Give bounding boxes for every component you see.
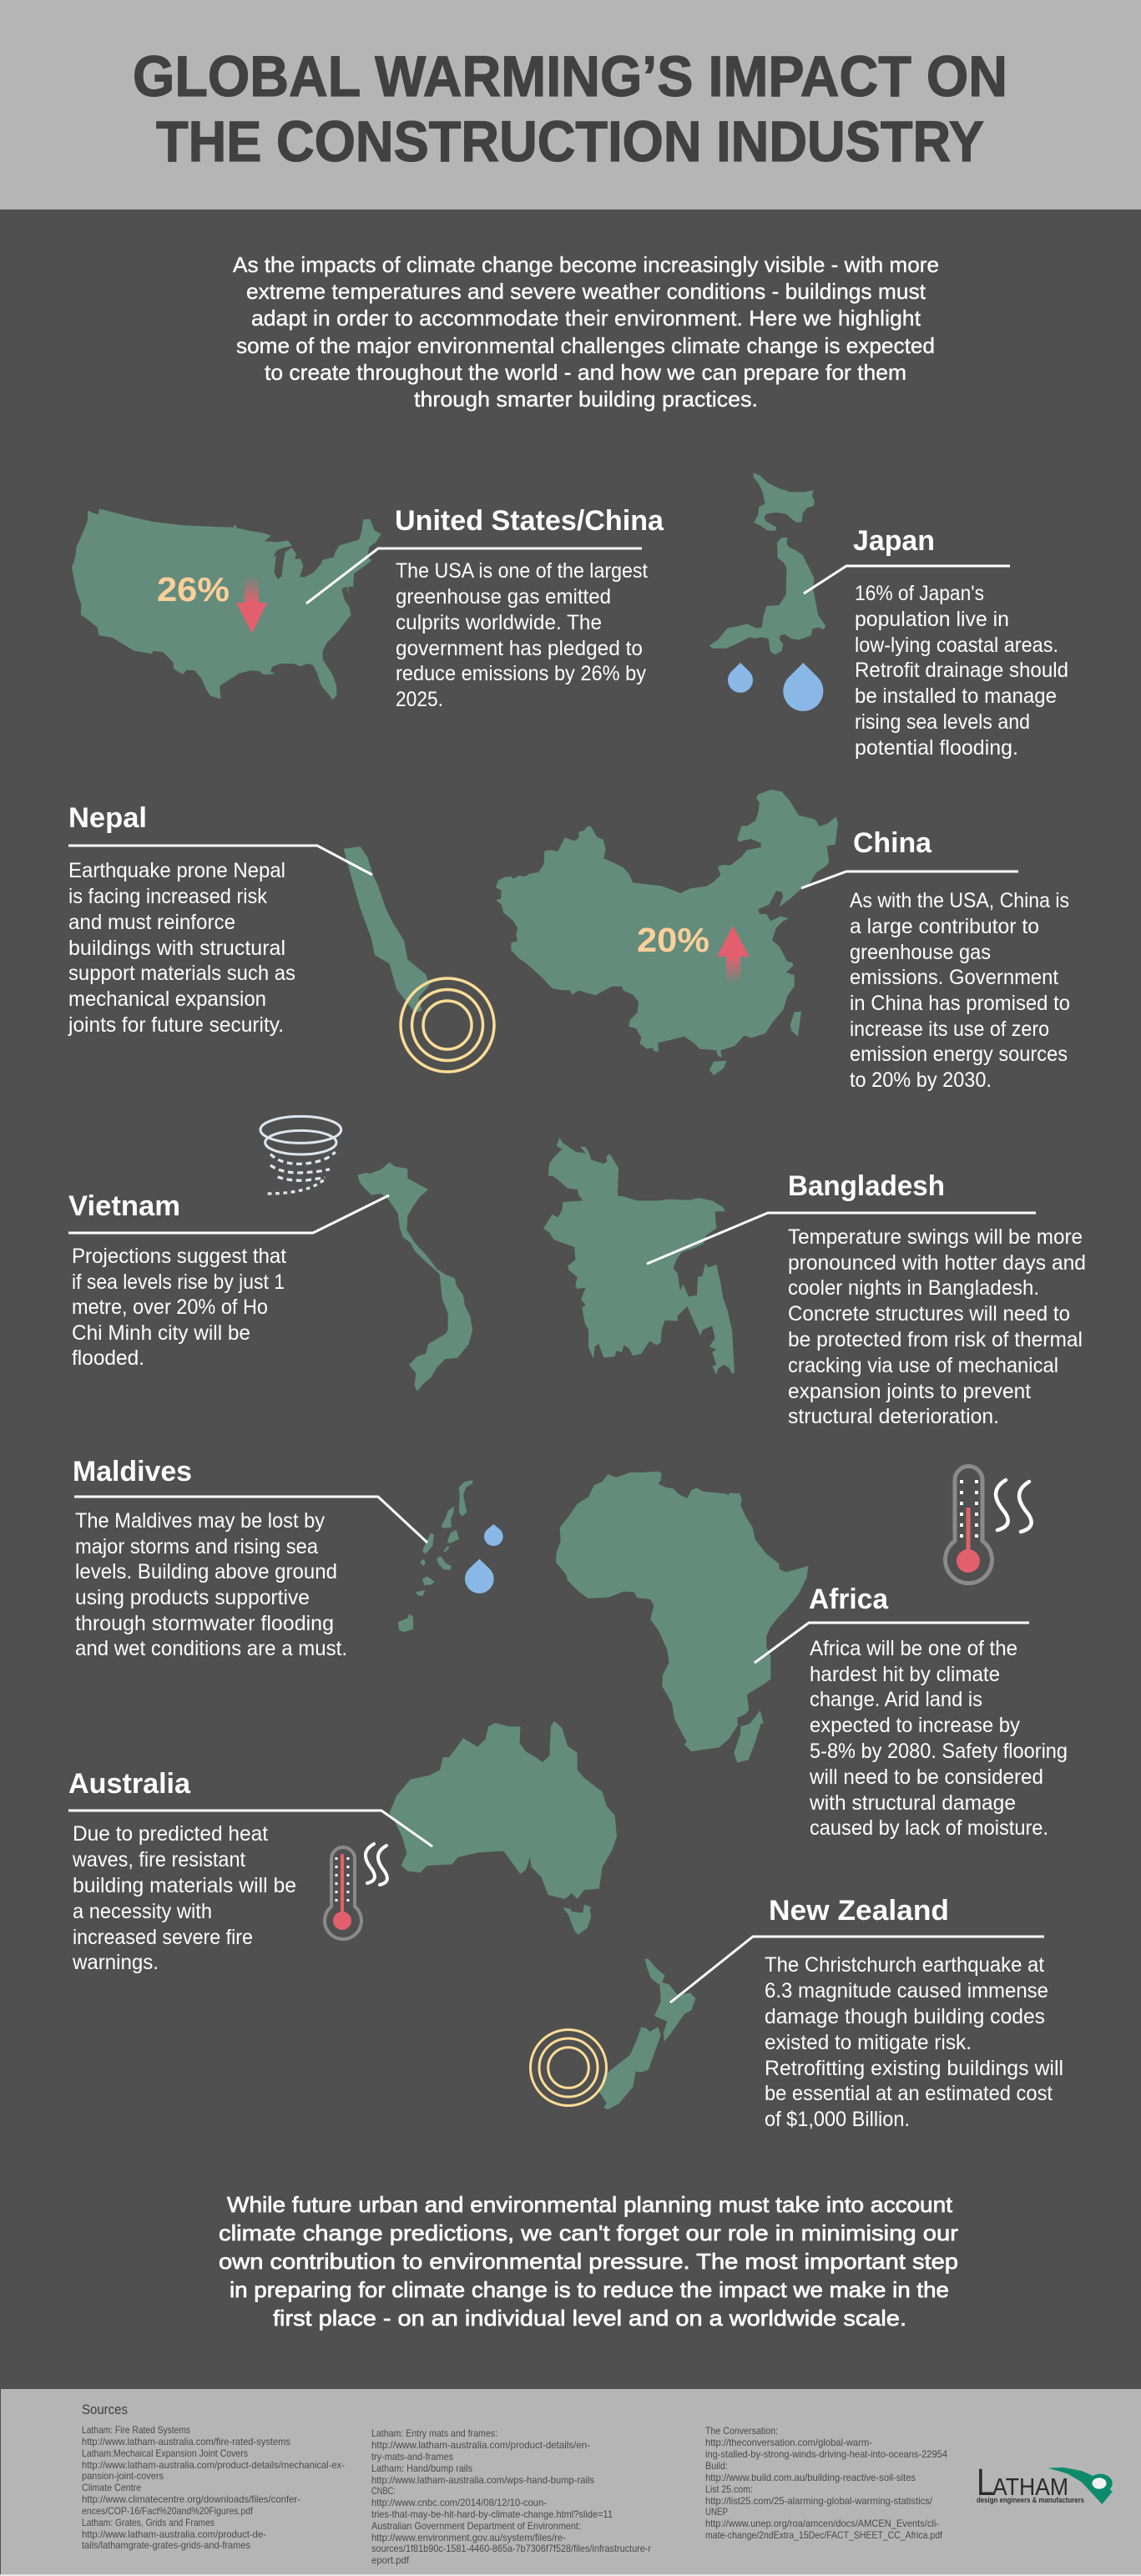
body text: existed to mitigate risk. [765, 2031, 972, 2054]
body text: increase its use of zero [850, 1018, 1049, 1041]
conclusion paragraph: While future urban and environmental planning must take into account [227, 2192, 953, 2217]
panel: Vietnam [68, 1116, 472, 1392]
body text: expected to increase by [810, 1714, 1020, 1737]
body text: emission energy sources [850, 1043, 1068, 1066]
sources column 1: Latham: Grates, Grids and Frames [82, 2517, 215, 2528]
body text: joints for future security. [68, 1013, 284, 1037]
body text: hardest hit by climate [810, 1663, 1000, 1686]
sources column 3: http://www.build.com.au/building-reactive-soil-sites [705, 2472, 916, 2483]
sources column 1: ences/COP-16/Fact%20and%20Figures.pdf [82, 2505, 254, 2517]
icon: heat waves [996, 1480, 1032, 1532]
leader line [801, 871, 1018, 888]
panel: China [496, 790, 1070, 1092]
body text: The USA is one of the largest [396, 559, 648, 583]
sources column 1: http://www.latham-australia.com/fire-rated-systems [82, 2436, 290, 2447]
map: Africa [556, 1472, 808, 1763]
icon: water drops [465, 1524, 503, 1594]
body text: cooler nights in Bangladesh. [788, 1276, 1039, 1300]
body text: Temperature swings will be more [788, 1225, 1083, 1249]
stat: 20%: 20% [637, 921, 709, 959]
heading: New Zealand [769, 1895, 949, 1927]
body text: expansion joints to prevent [788, 1380, 1031, 1403]
intro paragraph: through smarter building practices. [414, 386, 758, 412]
body text: emissions. Government [850, 966, 1058, 989]
body text: population live in [855, 608, 1009, 631]
panel: Australia [68, 1721, 617, 1974]
heading: Maldives [73, 1456, 192, 1488]
map: USA [72, 508, 381, 700]
map: Bangladesh [543, 1138, 735, 1375]
body text: of $1,000 Billion. [765, 2108, 910, 2131]
body text: mechanical expansion [68, 987, 266, 1011]
body text: and wet conditions are a must. [75, 1637, 347, 1660]
leader line [670, 1937, 1044, 2003]
body text: in China has promised to [850, 992, 1070, 1015]
sources column 1: http://www.latham-australia.com/product-details/mechanical-ex- [82, 2459, 345, 2471]
title: THE CONSTRUCTION INDUSTRY [156, 109, 984, 174]
panel: Bangladesh [543, 1138, 1086, 1428]
panel: Nepal [68, 802, 494, 1072]
sources column 3: UNEP [705, 2506, 728, 2518]
sources column 1: Climate Centre [82, 2482, 141, 2493]
body text: flooded. [72, 1346, 144, 1370]
map: Australia [390, 1721, 617, 1935]
body text: change. Arid land is [810, 1688, 982, 1711]
icon: heat waves [366, 1844, 387, 1885]
sources column 2: Latham: Hand/bump rails [371, 2462, 472, 2474]
conclusion paragraph: climate change predictions, we can't forget our role in minimising our [219, 2220, 958, 2245]
body text: increased severe fire [73, 1926, 253, 1949]
body text [809, 1637, 1068, 1840]
body text [72, 1822, 296, 1974]
conclusion paragraph: first place - on an individual level and on a worldwide scale. [273, 2306, 906, 2331]
body text: a necessity with [73, 1900, 212, 1923]
icon: earthquake rings [531, 2030, 606, 2105]
body text: The Maldives may be lost by [75, 1509, 325, 1533]
sources column 2: http://www.latham-australia.com/product-details/en- [371, 2439, 590, 2451]
heading: United States/China [395, 505, 664, 537]
sources column 2: sources/1f81b90c-1581-4460-865a-7b7306f7f528/files/infrastructure-r [371, 2543, 651, 2554]
body text: waves, fire resistant [72, 1848, 245, 1871]
intro paragraph: to create throughout the world - and how we can prepare for them [265, 360, 906, 385]
intro paragraph: As the impacts of climate change become increasingly visible - with more [233, 252, 939, 277]
body text: and must reinforce [68, 911, 235, 934]
icon: thermometer [325, 1844, 387, 1939]
body text: if sea levels rise by just 1 [72, 1270, 285, 1294]
body text: pronounced with hotter days and [788, 1251, 1086, 1275]
conclusion paragraph: own contribution to environmental pressure. The most important step [219, 2249, 958, 2274]
sources column 3: http://theconversation.com/global-warm- [705, 2437, 872, 2448]
body text: with structural damage [809, 1791, 1016, 1815]
body text [68, 859, 295, 1037]
body text: potential flooding. [855, 736, 1018, 760]
intro paragraph [233, 252, 939, 412]
body text: major storms and rising sea [75, 1535, 318, 1558]
panel: Africa [556, 1467, 1068, 1840]
icon: earthquake rings [401, 978, 494, 1072]
map: Maldives [398, 1480, 473, 1632]
sources column 3: ing-stalled-by-strong-winds-driving-heat-into-oceans-22954 [705, 2448, 947, 2460]
heading: Australia [68, 1768, 191, 1800]
body text: 5-8% by 2080. Safety flooring [810, 1740, 1068, 1763]
intro paragraph: extreme temperatures and severe weather conditions - buildings must [246, 279, 926, 304]
body text: greenhouse gas [850, 941, 991, 964]
body text: Projections suggest that [72, 1245, 286, 1268]
icon: water drops [728, 663, 823, 711]
body text: a large contributor to [850, 915, 1039, 938]
leader line [647, 1213, 1036, 1264]
heading: Nepal [68, 802, 147, 834]
arrow: up [717, 926, 750, 984]
body text: structural deterioration. [788, 1405, 999, 1428]
sources column 3: http://list25.com/25-alarming-global-warming-statistics/ [705, 2495, 933, 2507]
panel: Japan [709, 473, 1068, 760]
sources column 1: Latham:Mechaical Expansion Joint Covers [82, 2447, 248, 2459]
body text: 6.3 magnitude caused immense [765, 1979, 1048, 2003]
leader line [804, 566, 1010, 593]
body text: reduce emissions by 26% by [396, 662, 646, 685]
body text [788, 1225, 1086, 1428]
heading: sources: Sources [82, 2402, 128, 2417]
logo: Latham: design engineers & manufacturers [977, 2496, 1084, 2504]
intro paragraph: adapt in order to accommodate their environment. Here we highlight [251, 306, 921, 331]
body text [765, 1953, 1063, 2131]
sources column 3: List 25.com: [705, 2483, 753, 2495]
heading: Japan [853, 525, 935, 557]
sources column 1: http://www.latham-australia.com/product-de- [82, 2528, 266, 2540]
conclusion paragraph: in preparing for climate change is to reduce the impact we make in the [230, 2277, 949, 2302]
leader line [68, 1811, 432, 1846]
map: Vietnam [357, 1162, 472, 1392]
body text: buildings with structural [68, 937, 285, 960]
body text: Retrofitting existing buildings will [765, 2057, 1063, 2080]
body text: support materials such as [68, 962, 295, 985]
map: China [496, 790, 838, 1075]
heading: Vietnam [68, 1190, 180, 1222]
logo: Latham [977, 2461, 1113, 2504]
logo: Latham: L [977, 2461, 994, 2503]
body text [850, 889, 1070, 1092]
body text: Due to predicted heat [73, 1822, 268, 1846]
stat: 26%: 26% [157, 570, 230, 609]
body text: 2025. [396, 688, 443, 711]
sources column 3: mate-change/2ndExtra_15Dec/FACT_SHEET_CC_Africa.pdf [705, 2529, 943, 2541]
logo mark [1048, 2467, 1113, 2504]
leader line [68, 846, 372, 875]
logo: Latham: ATHAM [992, 2474, 1068, 2501]
icon: thermometer [945, 1467, 1032, 1583]
body text: Africa will be one of the [810, 1637, 1017, 1660]
leader line [74, 1497, 427, 1543]
sources column 3: http://www.unep.org/roa/amcen/docs/AMCEN_Events/cli- [705, 2518, 939, 2529]
body text [75, 1509, 347, 1660]
leader line [68, 1195, 389, 1233]
sources column 1: pansion-joint-covers [82, 2470, 164, 2482]
panel: United States [72, 505, 664, 711]
body text: Earthquake prone Nepal [68, 859, 285, 882]
sources column 2: tries-that-may-be-hit-hard-by-climate-change.html?slide=11 [371, 2508, 613, 2520]
title: GLOBAL WARMING’S IMPACT ON [133, 44, 1007, 109]
body text: rising sea levels and [855, 710, 1030, 734]
body text: low-lying coastal areas. [855, 634, 1058, 657]
sources column 1 [82, 2424, 345, 2551]
body text [855, 582, 1068, 760]
sources column 2: Australian Government Department of Environment: [371, 2520, 581, 2532]
icon: tornado [260, 1116, 341, 1194]
body text: be installed to manage [855, 684, 1057, 708]
body text: metre, over 20% of Ho [72, 1296, 268, 1319]
body text: As with the USA, China is [850, 889, 1069, 912]
body text: culprits worldwide. The [396, 611, 602, 634]
body text: Chi Minh city will be [72, 1321, 250, 1345]
map: New Zealand [599, 1959, 695, 2109]
sources column 3 [705, 2425, 947, 2541]
title [133, 44, 1007, 174]
sources column 1: http://www.climatecentre.org/downloads/files/confer- [82, 2493, 300, 2505]
body text: using products supportive [75, 1586, 310, 1609]
intro paragraph: some of the major environmental challenges climate change is expected [236, 333, 935, 358]
arrow: down [236, 575, 267, 634]
body text: Concrete structures will need to [788, 1302, 1070, 1326]
sources column 2: try-mats-and-frames [371, 2451, 453, 2462]
panel: Maldives [73, 1456, 503, 1660]
body text: 16% of Japan's [855, 582, 984, 605]
heading: Africa [809, 1583, 889, 1615]
map: Nepal [344, 846, 429, 1013]
body text: through stormwater flooding [75, 1612, 334, 1635]
body text: government has pledged to [396, 637, 643, 660]
sources column 2 [371, 2427, 651, 2566]
body text: be essential at an estimated cost [765, 2082, 1053, 2105]
body text: be protected from risk of thermal [788, 1328, 1083, 1351]
leader line [755, 1623, 1029, 1663]
sources column 2: http://www.environment.gov.au/system/files/re- [371, 2532, 566, 2543]
body text: greenhouse gas emitted [396, 585, 611, 609]
sources column 2: http://www.latham-australia.com/wps-hand-bump-rails [371, 2474, 594, 2486]
body text: caused by lack of moisture. [810, 1816, 1048, 1840]
sources column 2: Latham: Entry mats and frames: [371, 2427, 497, 2439]
panel: New Zealand [531, 1895, 1063, 2131]
body text: will need to be considered [809, 1765, 1043, 1789]
map: Japan [709, 473, 825, 654]
body text: The Christchurch earthquake at [765, 1953, 1044, 1977]
body text: is facing increased risk [68, 885, 267, 908]
body text: building materials will be [73, 1874, 296, 1897]
sources column 3: Build: [705, 2460, 728, 2472]
sources column 2: eport.pdf [371, 2554, 410, 2566]
sources column 3: The Conversation: [705, 2425, 778, 2437]
body text [396, 559, 648, 711]
sources column 2: http://www.cnbc.com/2014/08/12/10-coun- [371, 2497, 547, 2508]
sources column 2: CNBC: [371, 2485, 396, 2497]
header band [0, 0, 1141, 210]
body text: cracking via use of mechanical [788, 1354, 1058, 1377]
heading: Bangladesh [788, 1170, 945, 1202]
body text [72, 1245, 286, 1370]
body text: warnings. [72, 1951, 159, 1974]
footer: sources panel [0, 2389, 1141, 2576]
body text: Retrofit drainage should [855, 659, 1068, 682]
body text: to 20% by 2030. [850, 1068, 992, 1092]
body text: levels. Building above ground [75, 1560, 337, 1583]
body text: damage though building codes [765, 2005, 1045, 2028]
sources column 1: tails/lathamgrate-grates-grids-and-frames [82, 2539, 250, 2551]
sources column 1: Latham: Fire Rated Systems [82, 2424, 190, 2436]
conclusion paragraph [219, 2192, 958, 2331]
leader line [306, 548, 642, 604]
heading: China [853, 827, 932, 859]
